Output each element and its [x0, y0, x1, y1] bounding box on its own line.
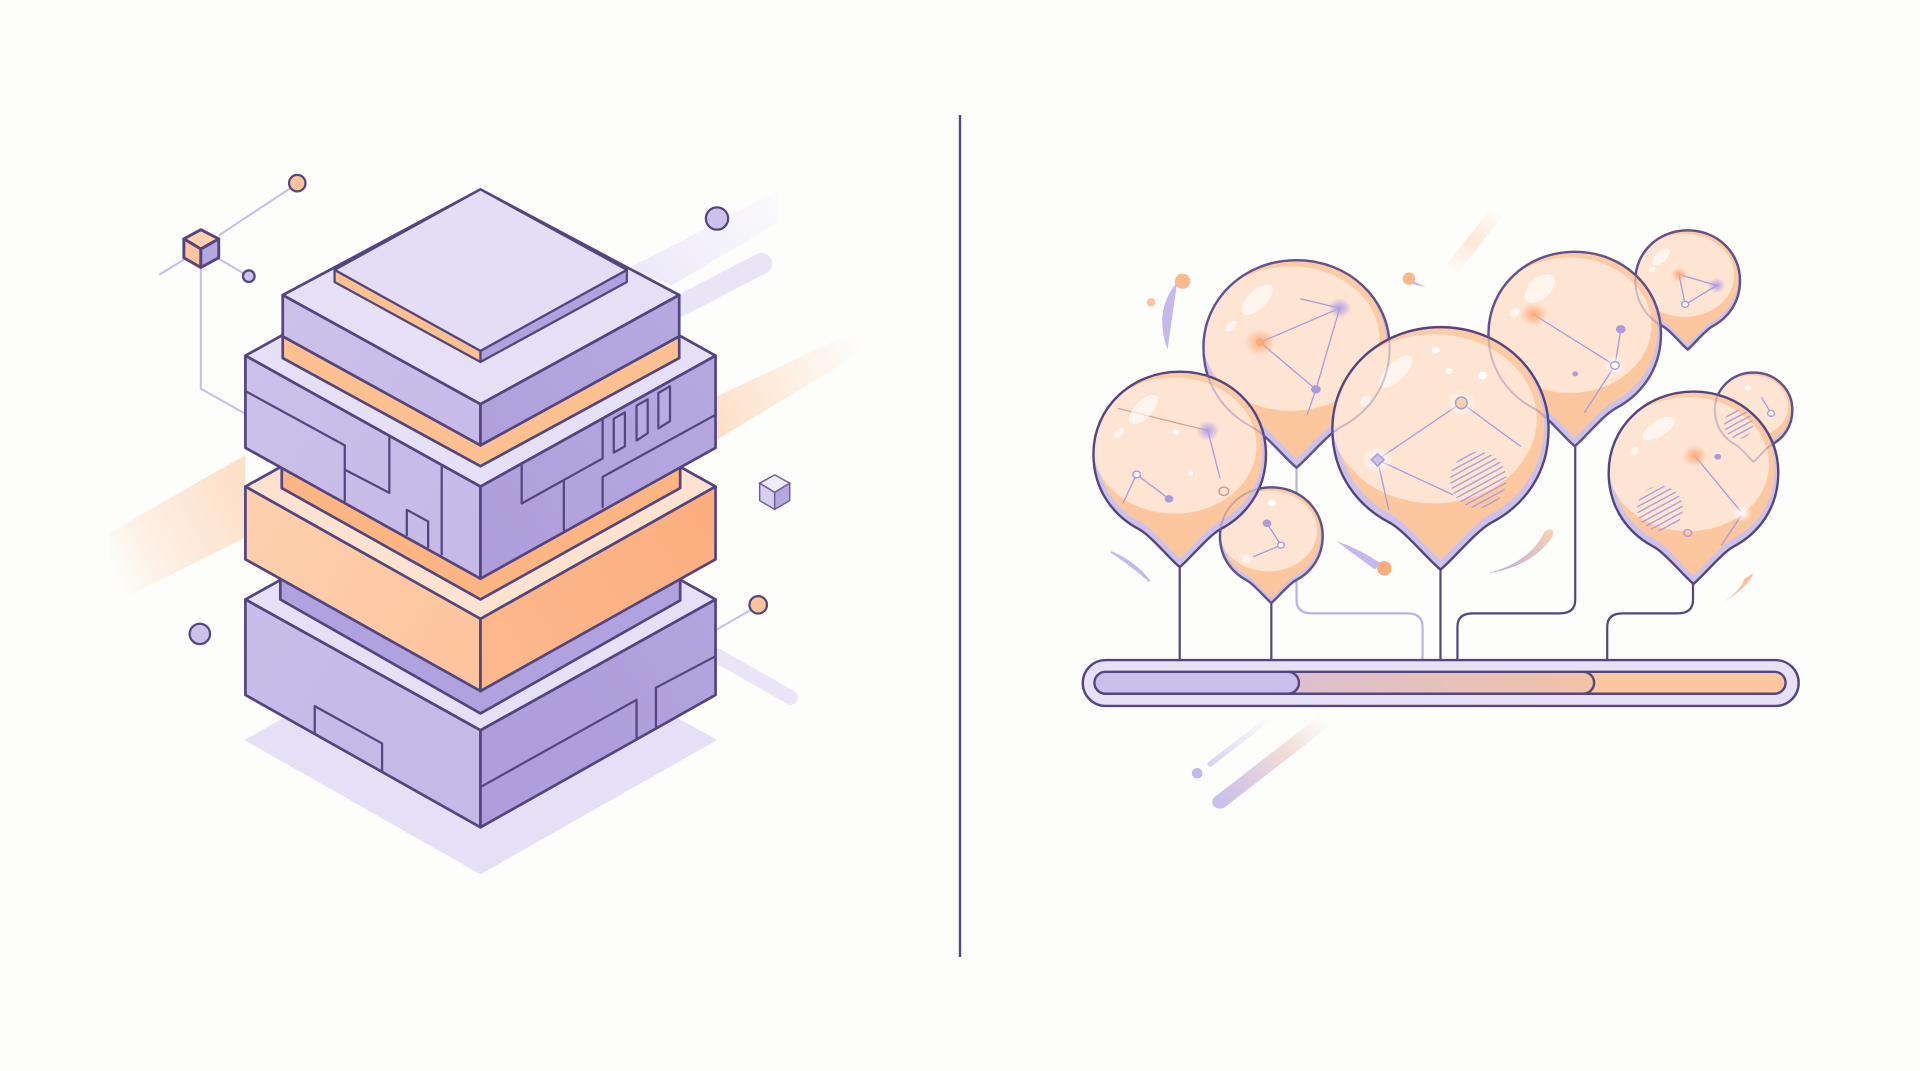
balloon: left	[1093, 371, 1266, 567]
balloon: center large	[1331, 327, 1549, 570]
center divider	[959, 115, 961, 957]
balloon strings	[1180, 445, 1693, 661]
bottom layer	[245, 469, 716, 827]
bar segment: blended middle	[1278, 672, 1594, 694]
orange layer	[245, 356, 716, 691]
bar segment: orange end	[1574, 672, 1786, 694]
balloon: top right small	[1635, 230, 1740, 350]
small cube: orange	[184, 230, 219, 267]
left panel: isometric stack	[110, 175, 860, 874]
balloon: upper left	[1203, 259, 1390, 468]
floor shadow	[244, 608, 717, 874]
background light bands	[110, 191, 860, 697]
top plate	[335, 189, 627, 362]
accent nodes	[190, 175, 767, 644]
balloon: small lower left	[1219, 487, 1323, 603]
progress bar	[1083, 660, 1799, 706]
balloon: upper right	[1488, 251, 1661, 446]
small cube: lavender	[760, 475, 790, 509]
floating streaks and particles	[1111, 213, 1754, 802]
upper layer	[283, 189, 679, 445]
right panel: balloons and progress bar	[1083, 213, 1799, 802]
balloon: right small behind	[1717, 371, 1794, 444]
bar segment: lavender start	[1094, 672, 1299, 694]
connector lines	[159, 188, 750, 630]
faint see-through outlines of overlapped balloons	[1203, 230, 1792, 603]
full illustration	[111, 115, 1800, 957]
circuit layer	[245, 225, 716, 579]
balloon: right	[1608, 391, 1778, 584]
orange separator strip	[283, 336, 679, 466]
